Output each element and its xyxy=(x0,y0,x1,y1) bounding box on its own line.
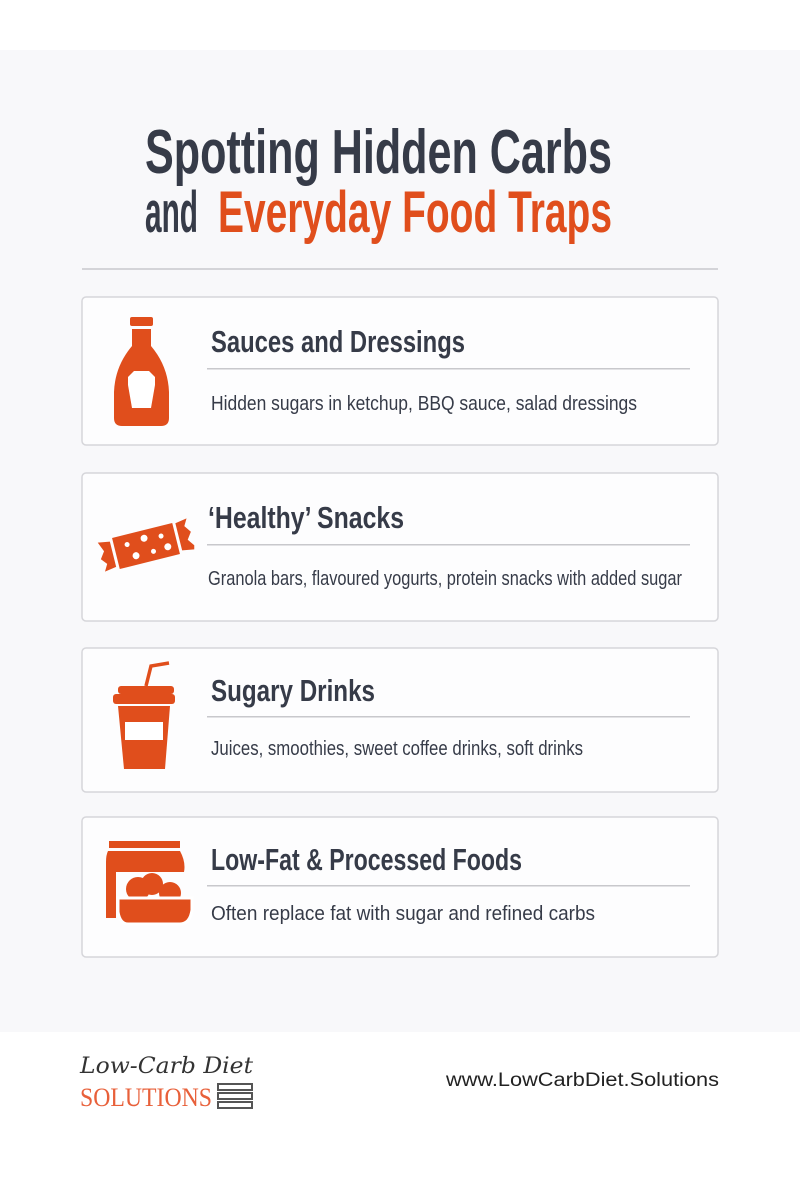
logo xyxy=(79,1054,253,1112)
icon: package with food xyxy=(106,841,192,924)
text: Granola bars, flavoured yogurts, protein snacks with added sugar xyxy=(208,568,682,590)
title: and xyxy=(145,180,198,245)
heading: ‘Healthy’ Snacks xyxy=(208,500,404,535)
panel: low-fat and processed foods xyxy=(82,817,718,957)
heading: Low-Fat & Processed Foods xyxy=(211,842,522,877)
text: Juices, smoothies, sweet coffee drinks, soft drinks xyxy=(211,738,583,760)
panel: sugary drinks xyxy=(82,648,718,792)
logo: SOLUTIONS xyxy=(80,1083,212,1112)
logo: Low-Carb Diet xyxy=(79,1054,253,1079)
website url: www.LowCarbDiet.Solutions xyxy=(445,1070,719,1091)
text: Often replace fat with sugar and refined carbs xyxy=(211,903,595,925)
panel: sauces and dressings xyxy=(82,297,718,445)
icon: bottle xyxy=(114,317,169,426)
panel: healthy snacks xyxy=(82,473,718,621)
icon: cup xyxy=(113,663,175,769)
heading: Sauces and Dressings xyxy=(211,324,465,359)
title: Everyday Food Traps xyxy=(218,180,612,245)
title: Spotting Hidden Carbs xyxy=(145,118,612,187)
icon: snack bar xyxy=(96,518,195,573)
heading: Sugary Drinks xyxy=(211,673,375,708)
text: Hidden sugars in ketchup, BBQ sauce, salad dressings xyxy=(211,393,637,415)
title xyxy=(145,118,612,245)
